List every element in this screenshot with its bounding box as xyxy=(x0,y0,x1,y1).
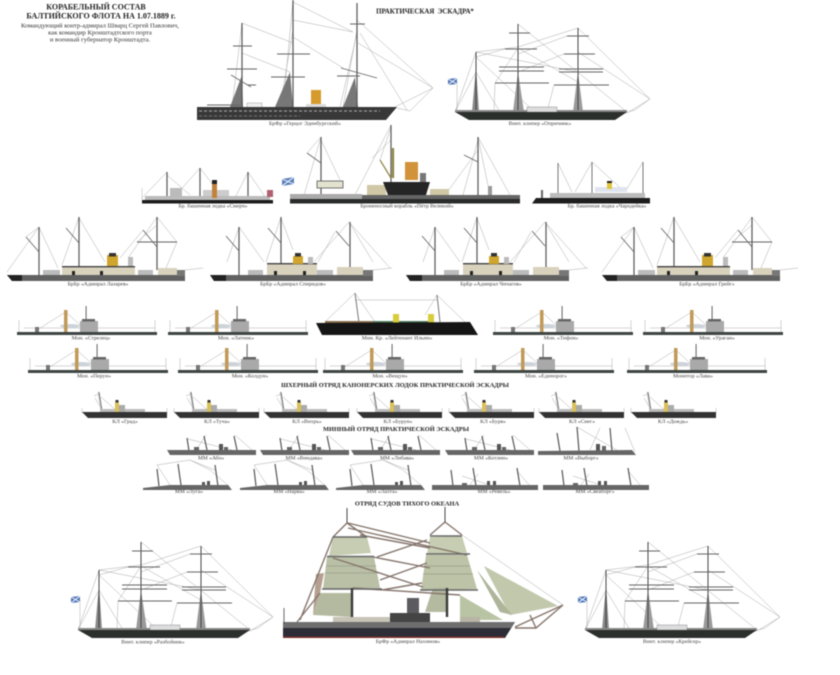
monitor: Perun: Мон. «Перун» xyxy=(77,374,111,380)
heading: pacific detachment: ОТРЯД СУДОВ ТИХОГО ОКЕАНА xyxy=(355,500,460,508)
torpedo boat: Narva: ММ «Нарва» xyxy=(273,489,305,495)
ship: Oprichnik clipper: Винт. клипер «Опричник» xyxy=(509,121,572,127)
torpedo boat: Libava xyxy=(351,435,440,462)
torpedo boat: Sveaborg xyxy=(543,468,649,495)
ship: Admiral Greig xyxy=(602,217,798,288)
torpedo boat: Narva xyxy=(240,460,329,495)
title block xyxy=(21,2,179,44)
torpedo boat: Vindava: ММ «Виндава» xyxy=(285,456,323,462)
monitor: Veshchun: Мон. «Вещун» xyxy=(372,374,408,380)
ship: Admiral Spiridov xyxy=(210,217,392,288)
torpedo boat: Lakhta xyxy=(336,460,425,495)
ship: Charodeika: Бр. башенная лодка «Чародейка» xyxy=(568,202,647,210)
torpedo boat: Kotlin: ММ «Котлин» xyxy=(474,456,508,462)
monitor: Tifon xyxy=(493,306,633,342)
ship: Admiral Lazarev xyxy=(7,217,203,288)
gunboat: Tucha xyxy=(174,392,259,425)
ship: Oprichnik clipper xyxy=(448,24,650,127)
monitor: Latnik: Мон. «Латник» xyxy=(218,336,254,342)
torpedo boat: Abo: ММ «Або» xyxy=(198,454,224,462)
ship: mine cruiser Leitenant Ilyin: Мин. Кр. «Лейтенант Ильин» xyxy=(362,334,432,342)
monitor: Perun xyxy=(28,344,168,380)
ship: Razboinik clipper xyxy=(71,542,273,646)
ship: Smerch: Бр. башенная лодка «Смерч» xyxy=(179,202,248,210)
gunboat: Dozhd: КЛ «Дождь» xyxy=(658,419,688,425)
monitor: Lava xyxy=(627,344,767,380)
monitor: Uragan: Мон. «Ураган» xyxy=(699,336,735,342)
title: КОРАБЕЛЬНЫЙ СОСТАВ xyxy=(46,2,146,12)
gunboat: Sneg xyxy=(539,392,624,425)
ship: Admiral Chichagov xyxy=(406,217,588,288)
hull and upperworks xyxy=(283,598,515,638)
heading: skerry gunboat detachment: ШХЕРНЫЙ ОТРЯД КАНОНЕРСКИХ ЛОДОК ПРАКТИЧЕСКОЙ ЭСКАДРЫ xyxy=(281,381,510,389)
torpedo boat: Sveaborg: ММ «Свеаборг» xyxy=(575,488,615,495)
monitor: Lava: Монитор «Лава» xyxy=(673,374,713,380)
torpedo boat: Revel: ММ «Ревель» xyxy=(478,489,511,495)
ship: Smerch xyxy=(142,168,273,210)
monitor: Tifon: Мон. «Тифон» xyxy=(544,334,579,342)
torpedo boat: Lakhta: ММ «Лахта» xyxy=(367,489,398,495)
gunboat: Tucha: КЛ «Туча» xyxy=(204,419,230,425)
torpedo boat: Kotlin xyxy=(445,435,534,462)
rigging xyxy=(297,507,563,628)
ship: Gertsog Edinburgsky: БрФр «Герцог Эдинбургский» xyxy=(269,120,341,127)
heading: torpedo detachment: МИННЫЙ ОТРЯД ПРАКТИЧЕСКОЙ ЭСКАДРЫ xyxy=(323,425,470,433)
ship: Admiral Nakhimov under sail: БрФр «Адмирал Нахимов» xyxy=(376,639,440,645)
commander text: Командующий контр-адмирал Шварц Сергей Павлович, xyxy=(21,22,179,30)
torpedo boat: Abo xyxy=(167,435,256,462)
gunboat: Vikhr xyxy=(264,392,349,425)
monitor: Uragan xyxy=(643,306,783,342)
ship: Admiral Greig: БрБр «Адмирал Грейг» xyxy=(679,280,735,288)
ship: Admiral Nakhimov under sail xyxy=(283,507,563,645)
ship: mine cruiser Leitenant Ilyin xyxy=(316,293,478,342)
monitor: Strelets xyxy=(17,306,157,342)
ship: Kreiser clipper xyxy=(578,542,780,645)
monitor: Edinorog xyxy=(474,344,614,380)
monitor: Edinorog: Мон. «Единорог» xyxy=(525,374,567,380)
torpedo boat: Vyborg: ММ «Выборг» xyxy=(563,454,599,462)
ship: Razboinik clipper: Винт. клипер «Разбойник» xyxy=(121,638,185,646)
monitor: Strelets: Мон. «Стрелец» xyxy=(72,336,111,342)
gunboat: Grad: КЛ «Град» xyxy=(112,419,138,425)
monitor: Latnik xyxy=(168,306,308,342)
gunboat: Grad xyxy=(82,392,167,425)
gunboat: Sneg: КЛ «Снег» xyxy=(569,419,595,425)
heading: practical squadron: ПРАКТИЧЕСКАЯ ЭСКАДРА* xyxy=(376,8,474,16)
title xyxy=(26,2,176,20)
gunboat: Burya xyxy=(449,392,534,425)
ship: Pyotr Veliky xyxy=(282,125,520,210)
ship: Gertsog Edinburgsky xyxy=(197,0,433,127)
torpedo boat: Vyborg xyxy=(538,427,636,462)
monitor: Koldun xyxy=(178,344,318,380)
commander text: и военный губернатор Кронштадта. xyxy=(50,36,151,44)
ship: Admiral Spiridov: БрБр «Адмирал Спиридов» xyxy=(260,282,326,288)
commander text: как командир Кронштадтского порта xyxy=(48,30,152,36)
title: БАЛТИЙСКОГО ФЛОТА НА 1.07.1889 г. xyxy=(26,12,176,20)
monitor: Koldun: Мон. «Колдун» xyxy=(232,374,269,380)
gunboat: Dozhd xyxy=(631,392,716,425)
torpedo boat: Luga: ММ «Луга» xyxy=(175,489,203,495)
gunboat: Burun xyxy=(357,392,442,425)
ship: Kreiser clipper: Винт. клипер «Крейсер» xyxy=(643,638,701,645)
ship: Admiral Chichagov: БрБр «Адмирал Чичагов» xyxy=(460,282,522,288)
torpedo boat: Luga xyxy=(143,460,232,495)
sails xyxy=(313,536,558,620)
ship: Charodeika xyxy=(532,162,650,210)
gunboat: Burya: КЛ «Буря» xyxy=(480,419,506,425)
ship: Pyotr Veliky: Броненосный корабль «Пётр Великий» xyxy=(360,202,454,210)
ship: Admiral Lazarev: БрБр «Адмирал Лазарев» xyxy=(68,282,129,288)
torpedo boat: Vindava xyxy=(260,435,349,462)
gunboat: Vikhr: КЛ «Вихрь» xyxy=(292,419,322,425)
torpedo boat: Revel xyxy=(432,468,538,495)
monitor: Veshchun xyxy=(323,344,463,380)
commander text xyxy=(21,22,179,44)
gunboat: Burun: КЛ «Бурун» xyxy=(384,419,413,425)
torpedo boat: Libava: ММ «Либава» xyxy=(380,454,414,462)
